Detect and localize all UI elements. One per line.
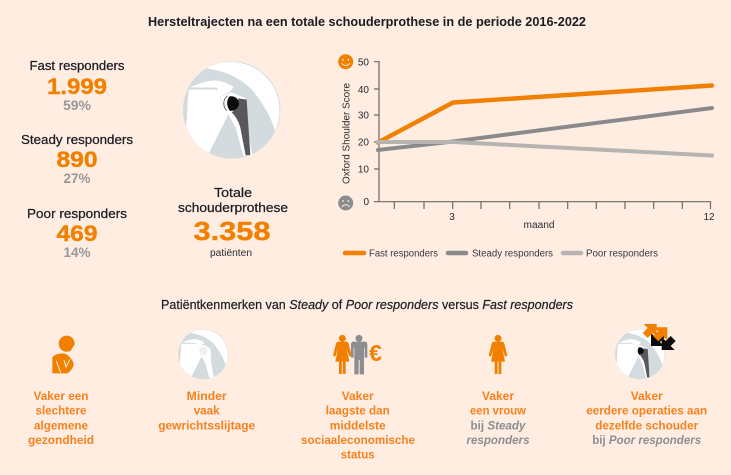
stat: fast responders: Fast responders — [30, 58, 125, 73]
text — [586, 389, 707, 447]
x axis labels: 3 — [449, 212, 455, 223]
line chart — [338, 54, 715, 231]
stat: steady responders: Steady responders — [21, 132, 134, 147]
text: Vaker — [631, 389, 663, 403]
text: responders — [466, 433, 530, 447]
stat: poor responders: 469 — [56, 221, 98, 246]
line: poor responders — [378, 142, 712, 156]
panel: responder counts — [21, 58, 134, 260]
total patients: patiënten — [210, 248, 252, 259]
y axis labels: 50 — [358, 58, 369, 68]
panel: less joint wear — [158, 329, 256, 432]
y axis labels — [358, 58, 369, 208]
chart legend: Fast responders — [369, 248, 438, 260]
text — [28, 389, 94, 447]
icon: man — [351, 335, 367, 374]
text: status — [341, 448, 375, 462]
y axis labels: 20 — [358, 138, 369, 148]
text: eerdere operaties aan — [586, 404, 707, 418]
panel: previous operations — [586, 324, 707, 447]
total patients — [178, 185, 288, 259]
text: gezondheid — [28, 433, 94, 447]
icon: black arrows — [651, 332, 676, 350]
stat: steady responders — [21, 132, 134, 186]
text: bij Poor responders — [592, 433, 702, 447]
text: Vaker een — [34, 389, 88, 403]
total patients: schouderprothese — [178, 200, 288, 215]
stat: fast responders — [30, 58, 125, 113]
heading: patient characteristics: Patiëntkenmerken van Steady of Poor responders versus Fast responders — [161, 297, 573, 312]
chart legend: Steady responders — [472, 248, 553, 260]
y axis title: Oxford Shoulder Score — [342, 83, 352, 184]
stat: fast responders: 1.999 — [47, 74, 107, 99]
stat: steady responders: 890 — [56, 147, 98, 172]
icon: person with hand on chest — [52, 336, 77, 373]
chart legend: Poor responders — [586, 248, 658, 260]
total patients: Totale — [214, 185, 252, 200]
stat: poor responders: 14% — [64, 244, 91, 260]
text: bij Steady — [470, 418, 527, 432]
text: een vrouw — [470, 404, 527, 418]
icon: healthy shoulder — [178, 329, 228, 379]
panel: socioeconomic status — [301, 335, 415, 462]
text: Vaker — [482, 389, 514, 403]
stat: poor responders — [27, 206, 128, 260]
icon: orange arrows — [643, 324, 667, 341]
stat: steady responders: 27% — [64, 170, 91, 186]
y axis labels: 10 — [358, 164, 369, 176]
chart legend — [345, 248, 658, 260]
total patients: 3.358 — [194, 216, 270, 246]
text — [158, 389, 256, 432]
text: middelste — [330, 418, 386, 432]
icon: woman — [489, 335, 507, 374]
icon: sad face — [338, 196, 353, 210]
title: Hersteltrajecten na een totale schouderprothese in de periode 2016-2022 — [148, 14, 586, 29]
text: dezelfde schouder — [595, 418, 699, 432]
text — [301, 389, 415, 462]
stat: poor responders: Poor responders — [27, 206, 128, 221]
icon: happy face — [338, 54, 353, 69]
text: algemene — [34, 418, 88, 432]
text: laagste dan — [326, 404, 390, 418]
text: sociaaleconomische — [301, 433, 415, 447]
icon: shoulder prosthesis small — [615, 329, 665, 379]
text: slechtere — [36, 404, 87, 418]
icon: euro sign: € — [369, 340, 382, 366]
text: Minder — [187, 389, 227, 403]
line: fast responders — [378, 86, 712, 142]
icon: shoulder prosthesis — [183, 61, 280, 159]
text — [466, 389, 530, 447]
panel: worse general health — [28, 336, 94, 447]
axes — [374, 62, 710, 209]
line chart: maand — [524, 220, 554, 231]
icon: woman — [333, 335, 352, 374]
y axis labels: 30 — [358, 110, 369, 122]
stat: fast responders: 59% — [63, 97, 92, 113]
y axis labels: 0 — [363, 197, 369, 208]
y axis labels: 40 — [358, 85, 369, 96]
text: Vaker — [342, 389, 374, 403]
panel: more often women — [466, 335, 530, 447]
text: gewrichtsslijtage — [158, 418, 256, 432]
text: vaak — [194, 404, 220, 418]
line chart: 12 — [703, 212, 715, 223]
line: steady responders — [378, 108, 712, 150]
